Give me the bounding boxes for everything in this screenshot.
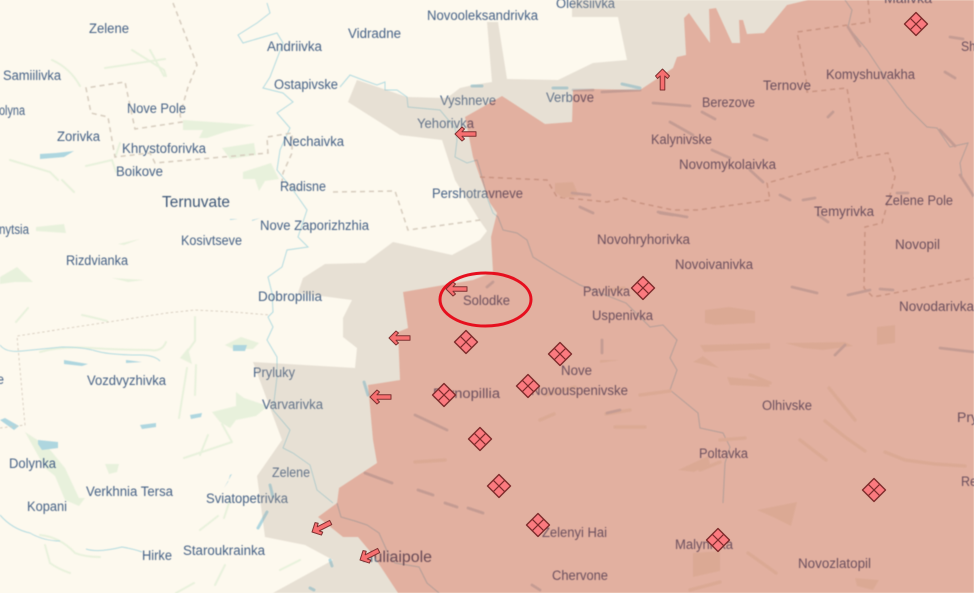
label: Novohryhorivka: Novohryhorivka <box>597 232 690 247</box>
arrow: Solodke west <box>446 282 467 296</box>
diamond marker 11 <box>862 478 886 502</box>
label: Rivnopillia: Rivnopillia <box>433 386 501 401</box>
diamond marker 8 <box>488 474 510 498</box>
label: Novopil: Novopil <box>895 237 940 252</box>
label: Zelenyi Hai: Zelenyi Hai <box>542 525 607 540</box>
arrow: Yehorivka west <box>455 127 476 141</box>
label: Novomykolaivka: Novomykolaivka <box>679 157 776 172</box>
label: Novoivanivka: Novoivanivka <box>675 257 753 272</box>
label: Temyrivka: Temyrivka <box>814 204 874 219</box>
label: Nove Pole: Nove Pole <box>127 101 186 116</box>
label: Zelene Pole: Zelene Pole <box>885 193 953 208</box>
label: Nove: Nove <box>561 363 592 378</box>
label: Dolynka: Dolynka <box>9 456 56 471</box>
label: Novouspenivske: Novouspenivske <box>531 383 628 398</box>
label: Verbove: Verbove <box>546 90 594 105</box>
arrow: southwest at Zelene <box>309 516 334 538</box>
label: Zorivka: Zorivka <box>57 129 100 144</box>
label: Zelene: Zelene <box>89 21 129 36</box>
diamond marker 1 <box>904 12 928 36</box>
label: Radisne: Radisne <box>280 179 326 194</box>
diamond marker 5 <box>516 374 540 398</box>
label: Staroukrainka: Staroukrainka <box>183 543 265 558</box>
label: Malynivka: Malynivka <box>675 537 733 552</box>
label: Solodke: Solodke <box>463 293 510 308</box>
label: Verkhnia Tersa: Verkhnia Tersa <box>86 484 173 499</box>
label: partial nytsia: nytsia <box>0 222 29 237</box>
label: Nove Zaporizhzhia: Nove Zaporizhzhia <box>260 218 369 233</box>
label: Vozdvyzhivka: Vozdvyzhivka <box>87 373 166 388</box>
solodke highlight circle <box>440 273 531 326</box>
diamond marker 6 <box>432 384 456 406</box>
label: Khrystoforivka: Khrystoforivka <box>122 141 206 156</box>
label: Novozlatopil: Novozlatopil <box>798 556 871 571</box>
label: Zelene south: Zelene <box>272 465 310 480</box>
label: Olhivske: Olhivske <box>762 398 812 413</box>
advance direction arrows <box>309 69 670 566</box>
label: Pryluky: Pryluky <box>253 365 295 380</box>
field patches and streams inside occupied zone <box>258 27 974 590</box>
label: Rizdvianka: Rizdvianka <box>66 253 128 268</box>
label: Chervone: Chervone <box>552 568 608 583</box>
label: Ostapivske: Ostapivske <box>274 77 338 92</box>
label: Vidradne: Vidradne <box>348 26 401 41</box>
label: Kosivtseve: Kosivtseve <box>181 233 242 248</box>
diamond marker 3 <box>454 330 478 354</box>
arrow: southwest at Huliaipole <box>357 544 382 566</box>
label: Novooleksandrivka: Novooleksandrivka <box>427 8 538 23</box>
arrow: north at Verbove <box>656 69 670 90</box>
label: Kalynivske: Kalynivske <box>651 132 712 147</box>
arrow: Varvarivka east <box>370 390 391 404</box>
label: Pavlivka: Pavlivka <box>583 284 630 299</box>
label: Samiilivka: Samiilivka <box>3 68 61 83</box>
label: Varvarivka: Varvarivka <box>262 397 323 412</box>
diamond marker 10 <box>706 528 730 552</box>
diamond marker 4 <box>548 342 572 366</box>
label: Berezove: Berezove <box>702 95 755 110</box>
diamond marker 7 <box>468 428 492 450</box>
occupied red zone <box>318 0 974 593</box>
label: Nechaivka: Nechaivka <box>283 134 344 149</box>
label: Ternove: Ternove <box>763 78 811 93</box>
label: Poltavka: Poltavka <box>699 446 748 461</box>
label: Novodarivka: Novodarivka <box>899 299 974 314</box>
label: Ternuvate: Ternuvate <box>162 194 230 211</box>
label: Boikove: Boikove <box>116 164 163 179</box>
strike markers <box>432 12 928 552</box>
label: Pershotravneve: Pershotravneve <box>432 186 523 201</box>
label: Vyshneve: Vyshneve <box>440 93 496 108</box>
label: Yehorivka: Yehorivka <box>417 116 474 131</box>
label: Andriivka: Andriivka <box>267 39 322 54</box>
vegetation patches <box>0 50 300 593</box>
diamond marker 2 <box>632 276 654 300</box>
label: Dobropillia: Dobropillia <box>258 289 322 304</box>
liberated grey zone <box>253 0 806 593</box>
label: Uspenivka: Uspenivka <box>592 308 653 323</box>
label: Kopani: Kopani <box>27 499 67 514</box>
diamond marker 9 <box>526 514 550 536</box>
label: Huliaipole: Huliaipole <box>362 549 432 566</box>
borders <box>0 0 974 428</box>
label: Hirke: Hirke <box>142 548 172 563</box>
arrow: west of Solodke <box>389 331 410 345</box>
label: Komyshuvakha: Komyshuvakha <box>826 67 915 82</box>
label: Sviatopetrivka: Sviatopetrivka <box>206 491 288 506</box>
